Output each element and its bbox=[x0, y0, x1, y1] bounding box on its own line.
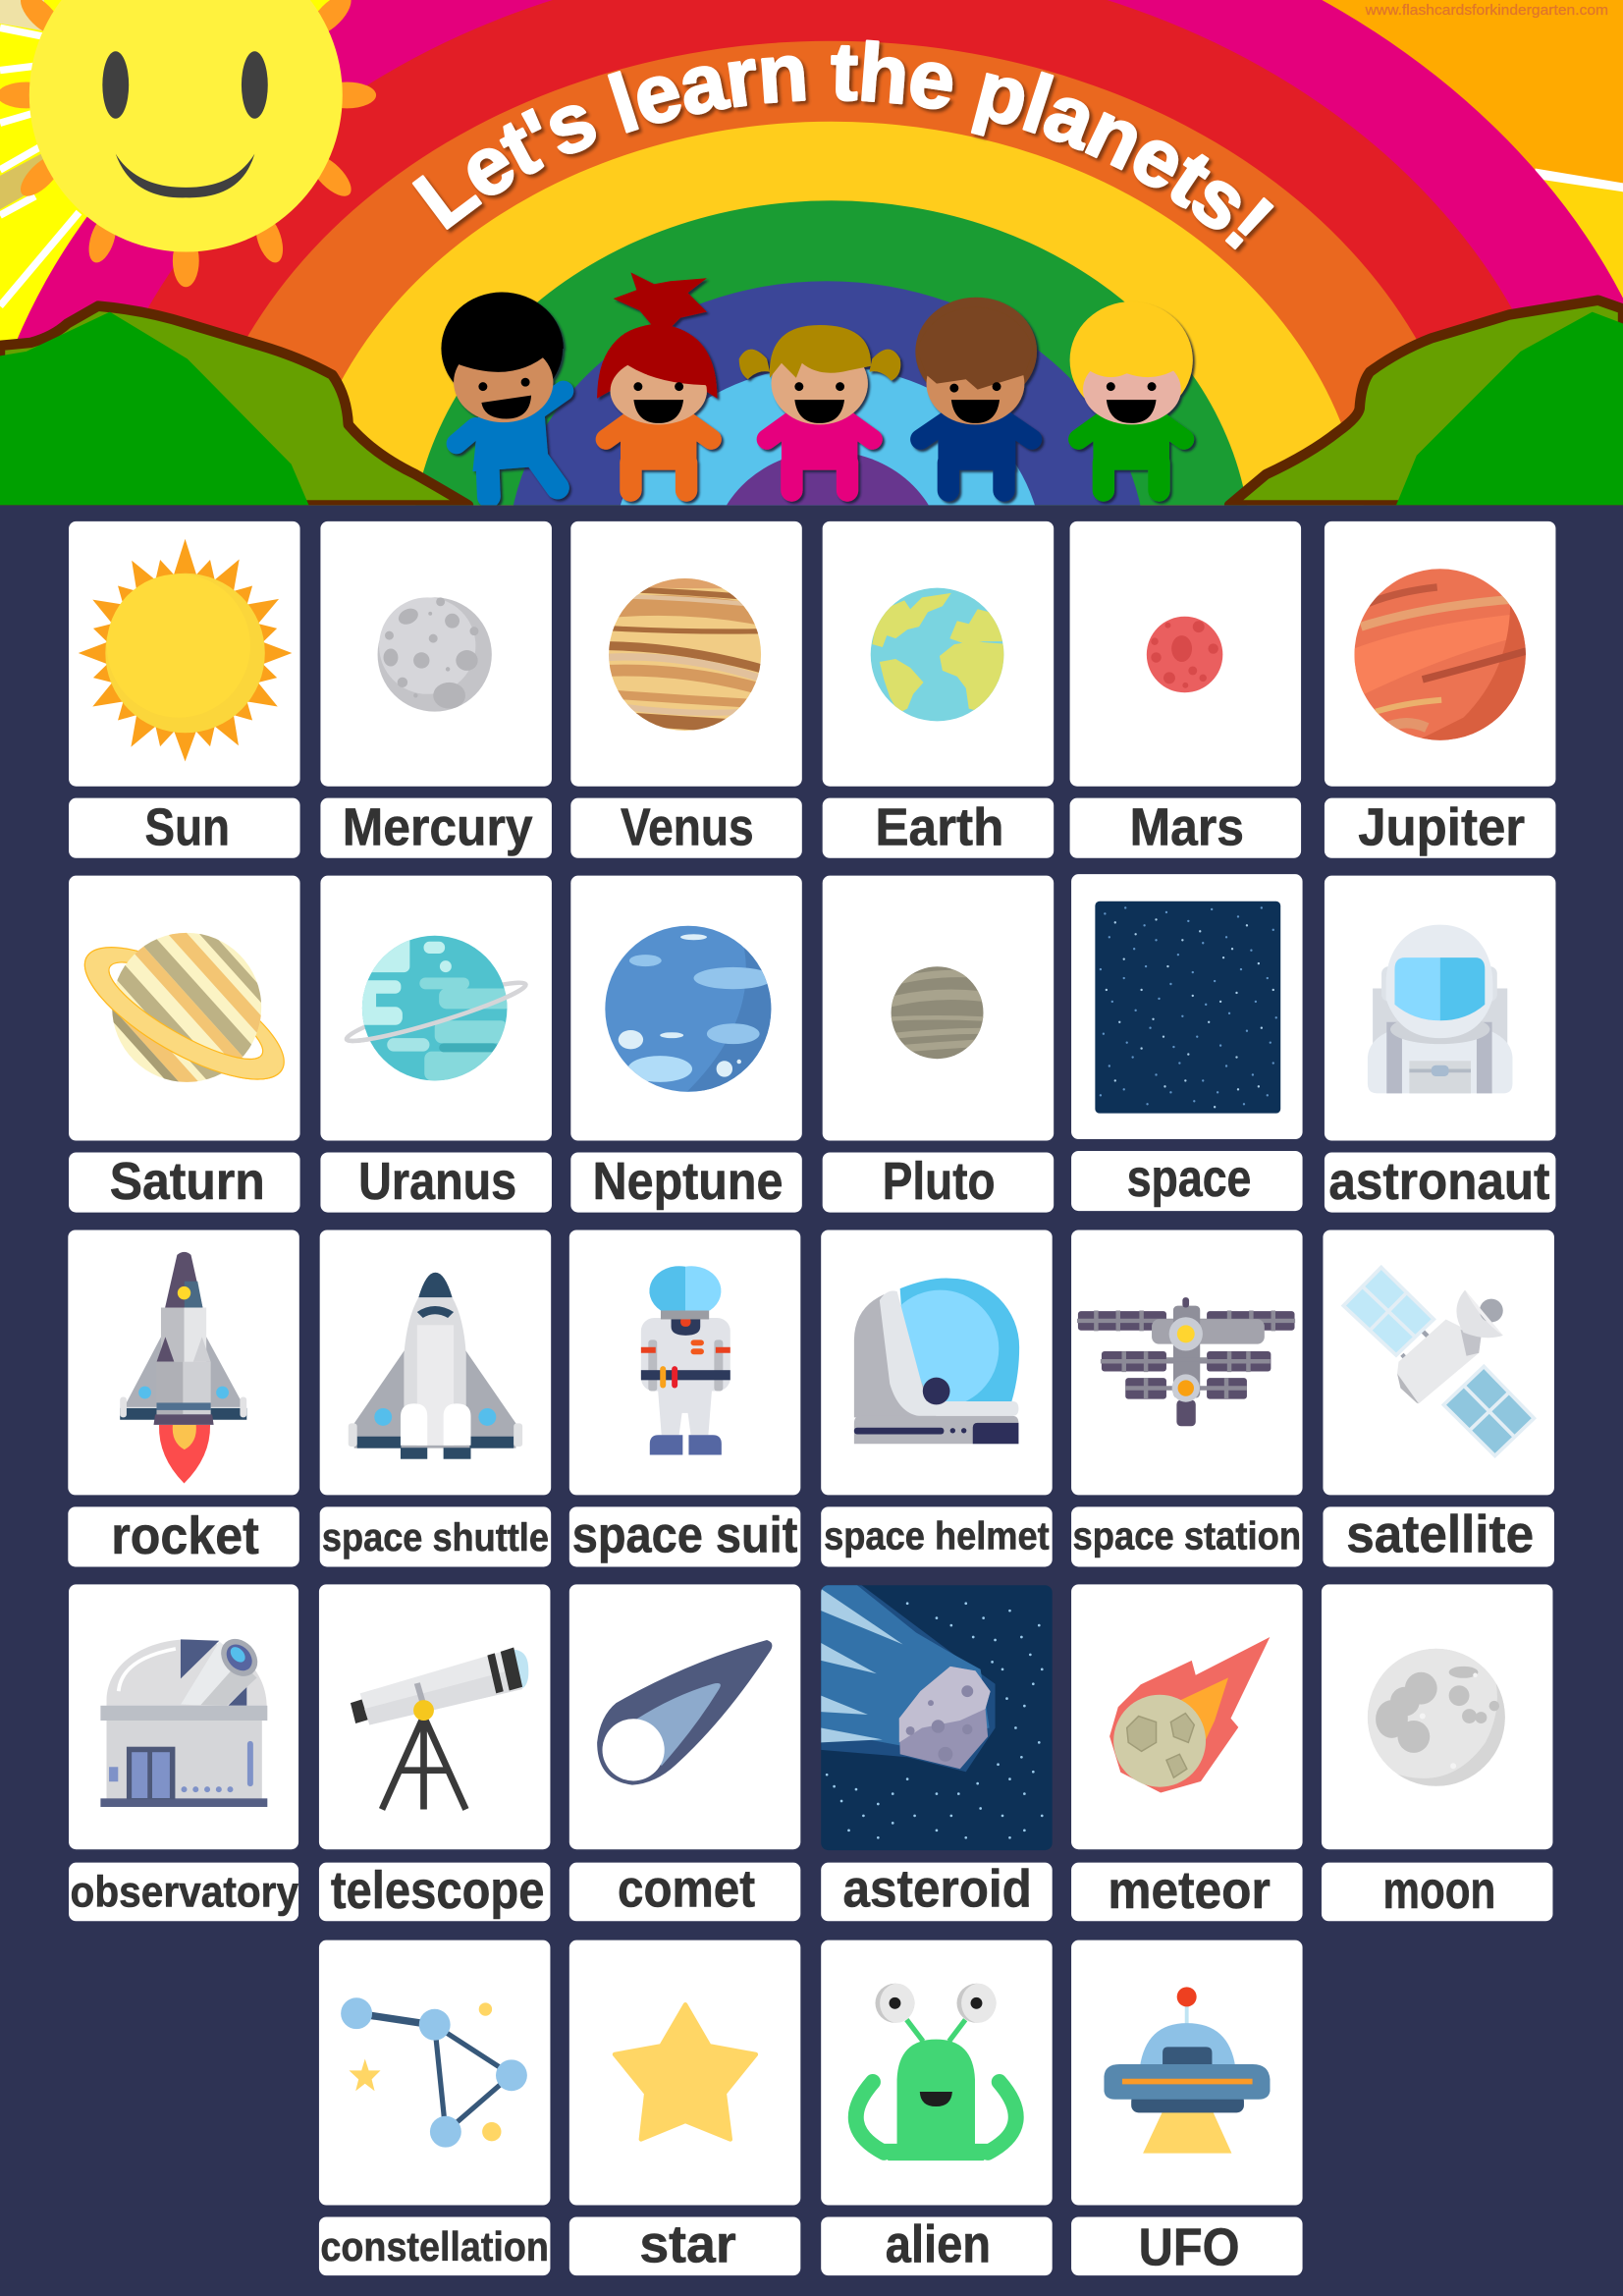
label: comet bbox=[569, 1859, 800, 1921]
card: asteroid bbox=[821, 1584, 1053, 1921]
label: observatory: observatory bbox=[71, 1868, 298, 1916]
card: star bbox=[569, 1941, 800, 2275]
card: Mercury bbox=[320, 521, 552, 858]
card: Earth bbox=[823, 521, 1054, 858]
card: satellite bbox=[1323, 1230, 1554, 1566]
icon: observatory bbox=[100, 1631, 267, 1807]
label: Sun: Sun bbox=[145, 797, 230, 856]
label: star bbox=[569, 2215, 800, 2275]
kid 2: red hair, orange suit bbox=[597, 272, 717, 491]
icon: star bbox=[615, 2004, 756, 2139]
sun rays left bbox=[0, 0, 79, 306]
label: Uranus: Uranus bbox=[358, 1152, 516, 1211]
kid 3: golden pigtails, pink suit bbox=[739, 325, 900, 491]
icon: moon bbox=[1368, 1648, 1505, 1786]
icon: mercury bbox=[378, 597, 492, 712]
rainbow bbox=[18, 0, 1623, 505]
icon: rocket bbox=[120, 1252, 246, 1483]
website url: www.flashcardsforkindergarten.com bbox=[1365, 3, 1608, 19]
icon: satellite bbox=[1343, 1268, 1534, 1455]
label: Jupiter: Jupiter bbox=[1358, 797, 1525, 856]
label: asteroid: asteroid bbox=[843, 1859, 1032, 1918]
label: rocket: rocket bbox=[111, 1506, 259, 1565]
label: Earth bbox=[823, 797, 1054, 858]
icon: UFO bbox=[1104, 1987, 1270, 2154]
icon: constellation bbox=[341, 1997, 527, 2148]
icon: sun bbox=[79, 539, 292, 761]
kid 1: black hair, blue suit bbox=[441, 292, 564, 496]
card: rocket bbox=[68, 1230, 299, 1566]
label: UFO bbox=[1071, 2216, 1303, 2277]
label: Mars bbox=[1070, 797, 1301, 858]
icon: comet bbox=[597, 1640, 772, 1785]
icon: venus bbox=[609, 578, 762, 731]
label: Pluto bbox=[823, 1152, 1054, 1213]
card: space bbox=[1071, 874, 1303, 1211]
left hill bbox=[0, 306, 468, 505]
icon: jupiter bbox=[1354, 569, 1526, 740]
icon: pluto bbox=[892, 966, 984, 1059]
label: telescope: telescope bbox=[331, 1861, 544, 1920]
label: space: space bbox=[1127, 1149, 1251, 1208]
card: alien bbox=[821, 1941, 1053, 2275]
icon: mars bbox=[1147, 617, 1222, 692]
icon: astronaut bbox=[1368, 925, 1512, 1093]
card: Jupiter bbox=[1325, 521, 1555, 858]
card: space station bbox=[1071, 1230, 1303, 1566]
label: Venus bbox=[570, 797, 802, 858]
card: Neptune bbox=[570, 876, 802, 1213]
smiling sun bbox=[0, 0, 376, 287]
label: Venus: Venus bbox=[621, 797, 754, 856]
label: star: star bbox=[639, 2215, 736, 2274]
icon: space suit bbox=[641, 1266, 730, 1455]
icon: space helmet bbox=[854, 1279, 1019, 1444]
label: constellation: constellation bbox=[320, 2223, 549, 2269]
label: space station: space station bbox=[1073, 1514, 1301, 1558]
card: moon bbox=[1322, 1584, 1552, 1921]
icon: earth bbox=[870, 587, 1003, 721]
label: Neptune: Neptune bbox=[593, 1152, 783, 1211]
card: observatory bbox=[69, 1584, 298, 1921]
label: space station bbox=[1071, 1506, 1303, 1566]
label: Pluto: Pluto bbox=[883, 1152, 996, 1211]
card: Pluto bbox=[823, 876, 1054, 1213]
card: Venus bbox=[570, 521, 802, 858]
label: moon bbox=[1322, 1861, 1552, 1921]
card: astronaut bbox=[1325, 876, 1555, 1213]
label: space suit: space suit bbox=[572, 1507, 797, 1564]
label: rocket bbox=[68, 1506, 299, 1566]
label: space helmet: space helmet bbox=[824, 1514, 1050, 1558]
icon: neptune bbox=[605, 925, 772, 1092]
card: space shuttle bbox=[320, 1230, 551, 1566]
label: astronaut: astronaut bbox=[1328, 1152, 1550, 1211]
icon: space station bbox=[1077, 1297, 1295, 1426]
icon: uranus bbox=[344, 931, 528, 1085]
label: Sun bbox=[69, 797, 300, 858]
card: Sun bbox=[69, 521, 300, 858]
card: Mars bbox=[1070, 521, 1301, 858]
sky right bbox=[1322, 0, 1623, 299]
icon: starfield bbox=[1095, 902, 1280, 1114]
label: space bbox=[1071, 1149, 1303, 1211]
sky left bbox=[0, 0, 330, 341]
label: alien: alien bbox=[886, 2215, 991, 2274]
label: moon: moon bbox=[1383, 1861, 1495, 1920]
icon: asteroid bbox=[821, 1584, 1042, 1837]
label: comet: comet bbox=[618, 1859, 755, 1918]
icon: saturn bbox=[84, 933, 285, 1082]
label: Mercury: Mercury bbox=[343, 797, 533, 856]
card: UFO bbox=[1071, 1941, 1303, 2277]
card: space suit bbox=[569, 1230, 800, 1566]
card: telescope bbox=[319, 1584, 550, 1921]
label: Mars: Mars bbox=[1130, 797, 1244, 856]
right hill bbox=[1229, 301, 1623, 505]
icon: alien bbox=[856, 1984, 1016, 2160]
card: space helmet bbox=[821, 1230, 1053, 1566]
card: Uranus bbox=[320, 876, 552, 1213]
icon: telescope bbox=[351, 1647, 528, 1810]
label: space shuttle bbox=[320, 1506, 551, 1566]
card: meteor bbox=[1071, 1584, 1303, 1921]
label: Saturn: Saturn bbox=[110, 1152, 265, 1211]
label: UFO: UFO bbox=[1139, 2218, 1239, 2277]
icon: space shuttle bbox=[349, 1273, 522, 1459]
card: comet bbox=[569, 1584, 800, 1921]
kid 4: brown hair, navy suit bbox=[915, 298, 1037, 491]
label: space helmet bbox=[821, 1506, 1053, 1566]
title: Let's learn the planets! bbox=[412, 39, 1278, 253]
header scene bbox=[0, 0, 1623, 505]
card: constellation bbox=[319, 1941, 550, 2275]
label: meteor: meteor bbox=[1108, 1861, 1271, 1920]
label: alien bbox=[821, 2215, 1053, 2275]
card: Saturn bbox=[67, 876, 308, 1213]
kid 5: yellow hair, green suit bbox=[1070, 301, 1193, 491]
label: Earth: Earth bbox=[875, 797, 1004, 856]
label: space shuttle: space shuttle bbox=[322, 1515, 549, 1559]
icon: meteor bbox=[1109, 1637, 1270, 1793]
label: satellite: satellite bbox=[1346, 1505, 1534, 1564]
